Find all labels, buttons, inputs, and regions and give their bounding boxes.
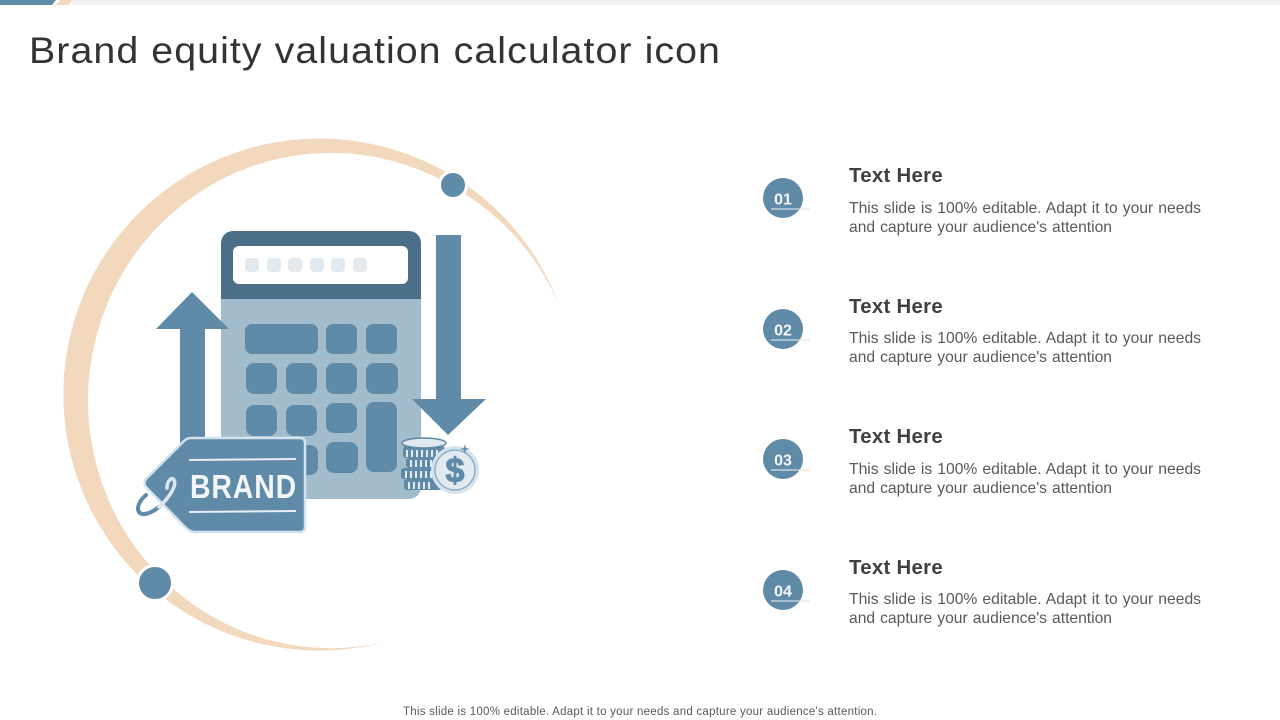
item 02 [763,295,1201,366]
heading 02: Text Here [849,295,943,318]
arrow: up [156,292,229,445]
number badge 04 [763,570,810,610]
heading 04: Text Here [849,556,943,579]
crescent ring [63,139,561,651]
number badge 02 [763,309,810,349]
icon: brand tag [138,438,305,532]
icon: calculator [221,231,421,499]
number badge 03: 03 [774,452,792,470]
icon: brand tag: BRAND [190,468,297,505]
description 01: This slide is 100% editable. Adapt it to your needs [849,200,1201,217]
description 03: This slide is 100% editable. Adapt it to your needs [849,461,1201,478]
heading 01: Text Here [849,164,943,187]
arrow: down [412,235,486,435]
title: Brand equity valuation calculator icon [29,29,721,71]
item 04 [763,556,1201,627]
ring dot top [440,172,466,198]
number badge 02: 02 [774,322,792,340]
number badge 01: 01 [774,192,792,208]
description 02: This slide is 100% editable. Adapt it to your needs [849,330,1201,347]
top accent bar [0,0,1280,5]
ring dot bottom [138,566,172,600]
footer note: This slide is 100% editable. Adapt it to your needs and capture your audience's attention. [403,706,877,718]
description 02: and capture your audience's attention [849,349,1112,366]
description 04: This slide is 100% editable. Adapt it to your needs [849,591,1201,608]
icon: coins and dollar [401,438,479,494]
item 03 [763,425,1201,497]
number badge 03 [763,439,810,479]
description 03: and capture your audience's attention [849,480,1112,497]
description 01: and capture your audience's attention [849,219,1112,236]
heading 03: Text Here [849,425,943,448]
number badge 01 [763,178,810,218]
item 01 [763,164,1201,236]
number badge 04: 04 [774,584,792,600]
icon: coins and dollar: $ [446,452,465,490]
description 04: and capture your audience's attention [849,610,1112,627]
